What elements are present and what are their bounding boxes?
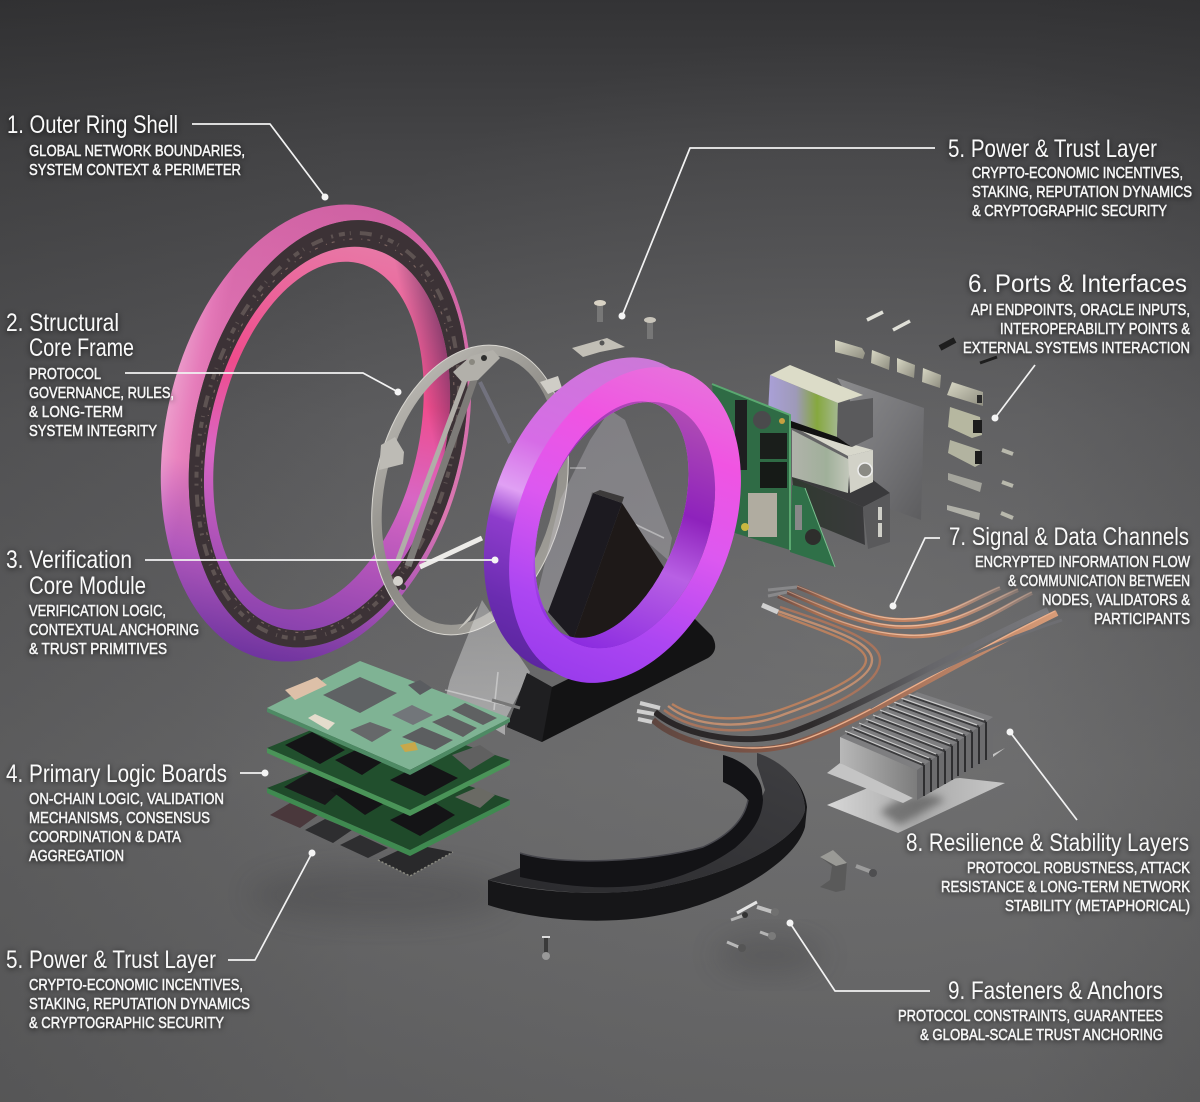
leader line 2	[125, 373, 402, 396]
arc upper tier	[520, 755, 763, 887]
label 5 lower: power and trust layer: 5. Power & Trust Layer	[6, 946, 216, 974]
module: dark	[792, 470, 890, 549]
top bracket and pins	[572, 300, 656, 357]
signal and data cables	[637, 586, 1062, 750]
label 8: resilience and stability layers	[906, 829, 1190, 915]
verification core module ring	[441, 324, 784, 717]
leader line 6	[992, 365, 1035, 422]
leader line 4	[240, 770, 268, 776]
leader line 9	[786, 920, 930, 991]
label 4: primary logic boards: COORDINATION & DATA	[29, 829, 181, 846]
label 2: structural core frame: SYSTEM INTEGRITY	[29, 423, 157, 440]
cable bundle: upper copper	[768, 586, 1032, 636]
label 2: structural core frame: PROTOCOL	[29, 366, 101, 383]
arc lower tier side	[488, 753, 807, 921]
label 2: structural core frame: 2. Structural	[6, 309, 119, 337]
label 5 lower: power and trust layer: CRYPTO-ECONOMIC INCENTIVES,	[29, 977, 243, 994]
label 4: primary logic boards: MECHANISMS, CONSENSUS	[29, 810, 210, 827]
arc lower tier top surface	[488, 753, 805, 893]
outer ring shell	[118, 173, 514, 693]
grey backing plate	[837, 378, 924, 520]
label 5 lower: power and trust layer: STAKING, REPUTATION DYNAMICS	[29, 996, 250, 1013]
label 6: ports and interfaces	[963, 270, 1190, 357]
label 3: verification core module: VERIFICATION LOGIC,	[29, 603, 166, 620]
label 7: signal and data channels	[949, 523, 1191, 628]
label 1: outer ring shell: GLOBAL NETWORK BOUNDARIES,	[29, 143, 245, 160]
black arc anchor	[488, 753, 807, 921]
label 1: outer ring shell: SYSTEM CONTEXT & PERIMETER	[29, 162, 241, 179]
leader line 7	[890, 538, 940, 610]
label 4: primary logic boards: 4. Primary Logic Boards	[6, 760, 227, 788]
label 3: verification core module: Core Module	[29, 572, 146, 600]
module: white	[792, 426, 873, 493]
label 6: ports and interfaces: 6. Ports & Interfaces	[968, 270, 1187, 298]
heat sink lower plate	[827, 778, 1005, 833]
leader line 5 lower	[228, 850, 316, 960]
label 4: primary logic boards	[6, 760, 227, 865]
clear acrylic stand	[445, 410, 672, 735]
cable bundle: looped copper	[664, 605, 880, 730]
circuit band inside ring	[149, 192, 508, 675]
memory chips row	[270, 803, 453, 876]
label 2: structural core frame	[6, 309, 174, 440]
leader line 8	[1006, 728, 1077, 820]
primary logic boards	[267, 661, 510, 876]
power modules	[768, 365, 890, 549]
cable bundle: lower sleeved	[637, 610, 1062, 750]
ports and connectors	[835, 312, 1013, 520]
label 5 lower: power and trust layer: & CRYPTOGRAPHIC SECURITY	[29, 1015, 224, 1032]
label 9: fasteners and anchors	[898, 977, 1163, 1044]
structural core frame	[344, 325, 596, 655]
label 3: verification core module: CONTEXTUAL ANCHORING	[29, 622, 199, 639]
rear circuit boards	[712, 384, 835, 567]
label 3: verification core module: 3. Verification	[6, 546, 132, 574]
label 5 upper: power and trust layer: 5. Power & Trust Layer	[948, 135, 1157, 163]
label 1: outer ring shell: 1. Outer Ring Shell	[7, 111, 178, 139]
label 3: verification core module: & TRUST PRIMITIVES	[29, 641, 167, 658]
label 2: structural core frame: Core Frame	[29, 334, 134, 362]
label 2: structural core frame: & LONG-TERM	[29, 404, 123, 421]
module: lavender and green	[768, 365, 873, 447]
board two	[267, 710, 510, 816]
leader line 5 upper	[618, 148, 935, 320]
inner ring lip	[168, 222, 486, 655]
label 3: verification core module	[6, 546, 199, 658]
label 2: structural core frame: GOVERNANCE, RULES,	[29, 385, 174, 402]
black wedge base	[492, 617, 715, 742]
black triangular core	[548, 490, 680, 645]
label 4: primary logic boards: ON-CHAIN LOGIC, VALIDATION	[29, 791, 224, 808]
board three	[267, 750, 510, 856]
brackets and fasteners	[542, 850, 877, 960]
board one	[267, 661, 510, 775]
leader line 1	[192, 124, 328, 200]
heat sink upper flange	[827, 748, 1005, 803]
heat sink	[827, 692, 1005, 833]
leader line 3	[145, 556, 498, 564]
label 5 lower: power and trust layer	[6, 946, 250, 1032]
label 4: primary logic boards: AGGREGATION	[29, 848, 124, 865]
label 5 upper: power and trust layer	[948, 135, 1192, 220]
label 1: outer ring shell	[7, 111, 245, 179]
